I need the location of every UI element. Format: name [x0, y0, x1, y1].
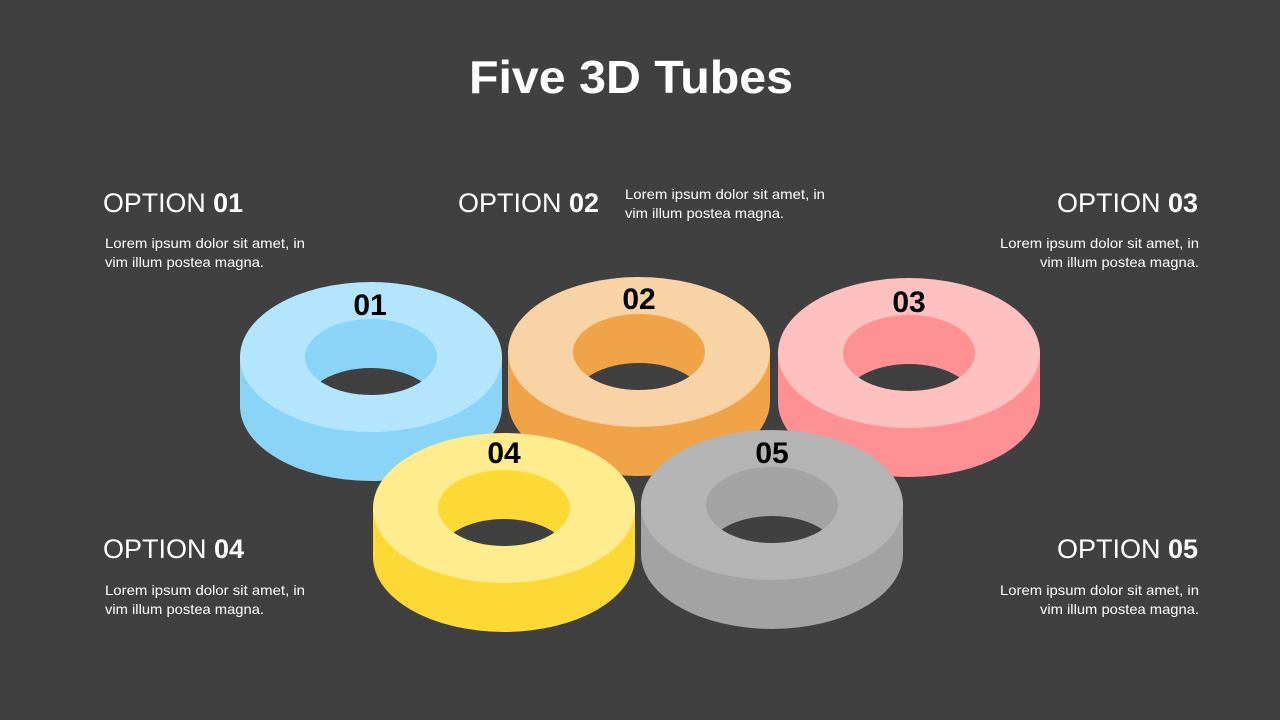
number 02: 02: [622, 283, 656, 316]
option 02 text block: Lorem ipsum dolor sit amet, in: [625, 186, 825, 202]
tube 03: [778, 278, 1040, 477]
option 02 text block: [458, 186, 825, 221]
option 03 text block: [1000, 188, 1199, 270]
option 04 text block: vim illum postea magna.: [105, 601, 264, 617]
tube 04: [373, 433, 635, 632]
option 01 text block: OPTION 01: [103, 188, 243, 218]
number 05: 05: [755, 437, 789, 470]
option 02 text block: vim illum postea magna.: [625, 205, 784, 221]
tube 01: [240, 282, 502, 481]
option 01 text block: Lorem ipsum dolor sit amet, in: [105, 235, 305, 251]
option 01 text block: [103, 188, 305, 270]
option 02 text block: OPTION 02: [458, 188, 599, 218]
tube 02: [508, 277, 770, 476]
option 04 text block: OPTION 04: [103, 534, 244, 564]
title: Five 3D Tubes: [469, 51, 793, 103]
option 03 text block: vim illum postea magna.: [1040, 254, 1199, 270]
option 03 text block: Lorem ipsum dolor sit amet, in: [1000, 235, 1199, 251]
option 05 text block: Lorem ipsum dolor sit amet, in: [1000, 582, 1199, 598]
option 04 text block: Lorem ipsum dolor sit amet, in: [105, 582, 305, 598]
option 03 text block: OPTION 03: [1057, 188, 1198, 218]
option 05 text block: vim illum postea magna.: [1040, 601, 1199, 617]
tube 05: [641, 430, 903, 629]
number 01: 01: [353, 289, 387, 322]
option 04 text block: [103, 534, 305, 617]
option 01 text block: vim illum postea magna.: [105, 254, 264, 270]
number 03: 03: [892, 286, 926, 319]
number 04: 04: [487, 437, 521, 470]
option 05 text block: OPTION 05: [1057, 534, 1198, 564]
option 05 text block: [1000, 534, 1199, 617]
